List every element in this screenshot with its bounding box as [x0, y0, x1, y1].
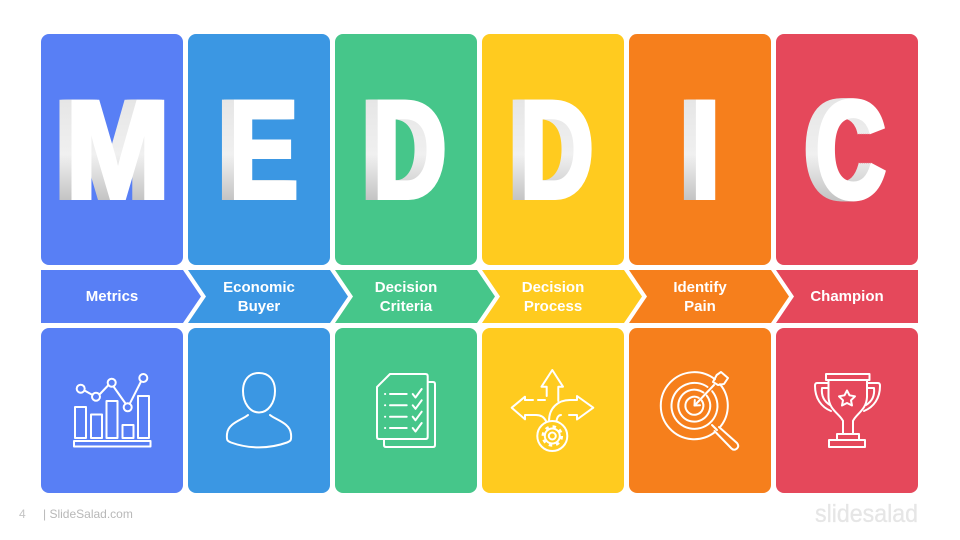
panel: Champion icon card — [776, 328, 918, 493]
letter C: C — [809, 71, 881, 228]
letter C: C — [813, 71, 885, 228]
arrow: Decision Criteria: Decision — [375, 279, 437, 296]
panel: Economic Buyer letter card — [188, 34, 330, 265]
arrow: Identify Pain: Pain — [684, 298, 716, 315]
panel: Decision Criteria letter card — [335, 34, 477, 265]
letter M: M — [61, 72, 167, 228]
letter M: M — [65, 72, 171, 228]
page number: 4 — [19, 507, 26, 521]
letter I: I — [690, 71, 721, 228]
letter D: D — [517, 72, 593, 229]
arrow: Identify Pain — [629, 270, 789, 323]
arrow: Decision Process: Decision — [522, 279, 584, 296]
letter C: C — [815, 71, 887, 228]
letter D: D — [368, 72, 444, 229]
letter E: E — [228, 73, 299, 228]
panel: Identify Pain letter card — [629, 34, 771, 265]
letter E: E — [218, 73, 289, 228]
letter E: E — [224, 73, 295, 228]
letter D: D — [366, 72, 442, 229]
footer source: | SlideSalad.com — [43, 507, 133, 521]
icon: checklist document — [377, 374, 435, 447]
panel: Economic Buyer icon card — [188, 328, 330, 493]
letter D: D — [519, 72, 595, 229]
icon: trophy with star — [815, 374, 880, 447]
arrow: Economic Buyer: Buyer — [238, 298, 280, 315]
icon: three-way arrows with gear — [512, 370, 593, 451]
letter C: C — [803, 71, 875, 228]
panel: Decision Process letter card — [482, 34, 624, 265]
panel: Decision Criteria icon card — [335, 328, 477, 493]
arrow: Economic Buyer: Economic — [223, 279, 295, 296]
arrow: Decision Process: Process — [524, 298, 582, 315]
arrow: Decision Criteria: Criteria — [380, 298, 433, 315]
letter I: I — [686, 71, 717, 228]
letter D: D — [372, 72, 448, 229]
letter D: D — [513, 72, 589, 229]
arrow: Champion — [776, 270, 918, 323]
letter I: I — [688, 71, 719, 228]
letter D: D — [364, 72, 440, 229]
logo: slidesalad: slidesalad — [815, 500, 918, 528]
letter M: M — [63, 72, 169, 228]
arrow: Decision Criteria — [335, 270, 495, 323]
letter C: C — [811, 71, 883, 228]
arrow: Champion: Champion — [810, 288, 884, 305]
arrow: Decision Process — [482, 270, 642, 323]
letter E: E — [220, 73, 291, 228]
arrow: Economic Buyer — [188, 270, 348, 323]
letter E: E — [226, 73, 297, 228]
icon: person — [227, 373, 291, 447]
letter M: M — [57, 72, 163, 228]
letter E: E — [216, 73, 287, 228]
letter D: D — [511, 72, 587, 229]
letter C: C — [807, 71, 879, 228]
letter D: D — [362, 72, 438, 229]
letter I: I — [680, 71, 711, 228]
letter D: D — [507, 72, 583, 229]
panel: Champion letter card — [776, 34, 918, 265]
letter I: I — [682, 71, 713, 228]
panel: Metrics letter card — [41, 34, 183, 265]
letter D: D — [370, 72, 446, 229]
icon: target with arrow and magnifier — [661, 372, 738, 450]
panel: Decision Process icon card — [482, 328, 624, 493]
letter M: M — [55, 72, 161, 228]
panel: Identify Pain icon card — [629, 328, 771, 493]
letter E: E — [222, 73, 293, 228]
letter I: I — [678, 71, 709, 228]
letter C: C — [805, 71, 877, 228]
arrow: Identify Pain: Identify — [673, 279, 727, 296]
letter M: M — [53, 72, 159, 228]
letter D: D — [360, 72, 436, 229]
panel: Metrics icon card — [41, 328, 183, 493]
letter I: I — [684, 71, 715, 228]
arrow: Metrics: Metrics — [86, 288, 138, 305]
letter D: D — [509, 72, 585, 229]
letter D: D — [515, 72, 591, 229]
icon: bar and line chart — [74, 374, 150, 446]
letter M: M — [59, 72, 165, 228]
arrow: Metrics — [41, 270, 201, 323]
